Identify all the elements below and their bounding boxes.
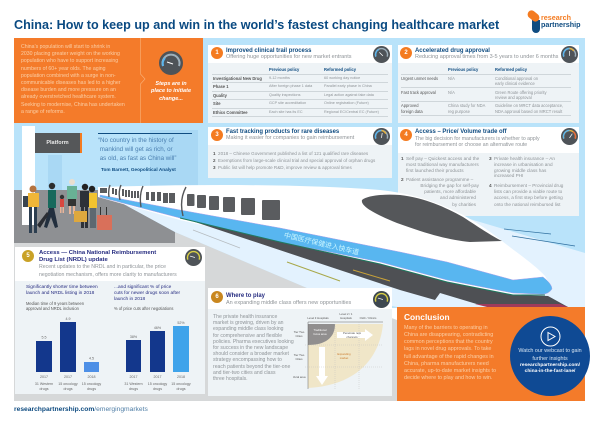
table 2: China study for NDA [448, 103, 485, 108]
table 1: Quality [213, 92, 227, 98]
table 1: After foreign phase 1 data [269, 84, 312, 88]
intro text: a range of reforms. [21, 109, 65, 115]
table 1: Investigational New Drug [213, 76, 262, 80]
bar chart: price cuts: 2017 [130, 375, 138, 379]
table 2: Urgent unmet needs [401, 76, 438, 80]
chart heading right [114, 284, 180, 302]
heading 5: Access — China National Reimbursement [39, 250, 156, 256]
market map: Cities [296, 334, 303, 338]
number 6: 6 [215, 294, 219, 300]
intro text: 2030 placing greater weight on the working [21, 51, 120, 57]
bar chart: time: 15 oncology [82, 382, 101, 386]
subheading 5: Recent updates to the NRDL and in particular, the price [39, 264, 166, 270]
table 1: 60 working day notice [324, 76, 360, 80]
body text 6: should consider a broader market [213, 351, 289, 357]
bar chart: price cuts: 2017 [154, 375, 162, 379]
list 4 left: 2 [401, 177, 404, 182]
icon: gauge [159, 51, 183, 75]
table 2: foreign data [401, 109, 423, 114]
table 2: Approved [401, 103, 419, 108]
callout: steps: change... [159, 96, 183, 102]
heading 6: Where to play [226, 292, 265, 298]
body text 6: for success in the new landscape [213, 345, 288, 351]
list 4 left: and administered [440, 195, 476, 200]
list 4 right: 4 [489, 183, 492, 188]
body text 6: strategy encompassing how to [213, 357, 282, 363]
icon: play [540, 326, 560, 346]
market map: Cities [296, 357, 303, 361]
bar chart: time: 5.5 [42, 336, 46, 340]
bar chart: price cuts: 38% [130, 335, 138, 339]
list 4 right: lists can provide a viable route to [494, 189, 562, 194]
quote: “No country in the history of [98, 137, 174, 144]
body text 6: for comprehensive and flexible [213, 333, 282, 339]
chart heading left [26, 284, 98, 296]
callout: steps: place to initiate [151, 88, 191, 94]
list 3 [213, 150, 376, 170]
heading 1: Improved clinical trail process [226, 48, 311, 54]
quote [98, 133, 192, 174]
bar chart: price cuts: drugs [129, 387, 138, 391]
illustration: passengers [23, 179, 112, 233]
list 4 left: Self pay – Quickest access and the [406, 156, 479, 161]
panel: introduction [14, 38, 203, 123]
conclusion heading: Conclusion [404, 312, 450, 322]
list 4 right: access, a first step before getting [494, 195, 563, 200]
table 1: Phase 1 [213, 84, 228, 89]
panel: conclusion [397, 307, 585, 401]
number 3 [211, 129, 223, 141]
subheading 4 [415, 136, 540, 148]
table 2: Reformed policy [495, 66, 527, 72]
intro text: China’s population will start to shrink in [21, 44, 110, 50]
subheading 5 [39, 264, 177, 278]
body text 6: The private health insurance [213, 314, 277, 320]
bar chart: time: drugs [87, 387, 96, 391]
logo: research partnership: partnership [541, 20, 581, 28]
number 2: 2 [404, 50, 408, 56]
conclusion text: accurate, up-to-date market insights to [404, 368, 496, 374]
body text 6: policies. Pharma executives looking [213, 339, 294, 345]
list 4 right: growing middle class has [494, 168, 546, 173]
table 1: Ethics Committee [213, 110, 248, 114]
logo: research partnership [528, 10, 581, 33]
intro text: Seeking to modernise, China has undertaken [21, 102, 125, 108]
body text 6: reach patients beyond the tier-one [213, 364, 290, 370]
chart note right: % of price cuts after negotiations [114, 306, 173, 310]
body text 6: market is growing, driven by an [213, 320, 284, 326]
market map [293, 312, 383, 389]
table 2: Previous policy [448, 66, 478, 72]
bar chart: price cuts: 15 oncology [148, 382, 167, 386]
list 4 right: increase in urbanisation and [494, 162, 553, 167]
sign: Platform: Platform [46, 140, 69, 146]
conclusion text: common perceptions that the country [404, 339, 493, 345]
conclusion text: decide where to play and how to win. [404, 375, 492, 381]
bar chart: price cuts: drugs [176, 387, 186, 391]
bar chart: price cuts: 46% [154, 326, 162, 330]
number 4: 4 [404, 132, 408, 138]
bar chart: time: drugs [40, 387, 49, 391]
number 2 [400, 47, 412, 59]
table 2: Guideline on MRCT data acceptance, [495, 103, 563, 108]
body text 6: expanding middle class looking [213, 326, 284, 332]
market map: Expanding [337, 352, 351, 356]
bar chart: time: 15 oncology [58, 382, 78, 386]
body text 6: and tier-two cities and class [213, 370, 276, 376]
bar chart: price cuts: 15 oncology [171, 382, 191, 386]
quote attribution: Tom Barnett, Geopolitical Analyst [101, 166, 176, 172]
list 3: 2 Exemptions from large-scale clinical trial and special approval of orphan drugs [213, 158, 375, 163]
table 1: Site [213, 101, 221, 106]
bar chart: price cuts: 31 Western [124, 382, 143, 386]
bar chart: time: 2017 [64, 375, 72, 379]
list 4 right: onto the national reimbursed list [494, 202, 560, 207]
table 1: Reformed policy [324, 66, 356, 72]
subheading 3: Making it easier for companies to gain reimbursement [226, 135, 354, 141]
table 2: Green Route offering priority [495, 90, 547, 94]
table 2: N/A [448, 90, 455, 94]
table 1: GCP site accreditation [269, 101, 306, 105]
intro text: already overstretched healthcare system. [21, 94, 116, 100]
bar chart: time: drugs [64, 387, 73, 391]
market map: channels [346, 335, 358, 339]
market map: Level 3 Hospitals [307, 316, 329, 320]
market map: Tier Two [294, 353, 305, 357]
bar chart: time [35, 317, 102, 391]
chart note left: Median time of 9 years between [26, 300, 84, 306]
table 1: 9-12 months [269, 76, 290, 80]
intro text [21, 44, 125, 115]
market map: OHC / Clinics [360, 316, 377, 320]
table 2: reg purpose [448, 109, 470, 114]
icon: gauge 1 [373, 46, 390, 63]
table 1: Regional EC/Central EC (Future) [324, 110, 379, 114]
number 4 [400, 129, 412, 141]
list 3: 3 Public list will help promote R&D, improve review & approval times [213, 165, 352, 170]
footer link: researchpartnership.com/emergingmarkets [14, 406, 148, 413]
subheading 2: Reducing approval times from 3-5 years to under 6 months [415, 54, 558, 60]
market map: Level 2 / 1 [340, 312, 353, 316]
sign: Platform [35, 133, 82, 153]
chart heading right: cuts for newer drugs soon after [114, 291, 180, 296]
bar chart: time: 4.5 [89, 356, 94, 360]
chart heading left: Significantly shorter time between [26, 285, 98, 290]
subheading 4: The big decision for manufacturers is whether to apply [415, 136, 540, 142]
icon: gauge 3 [373, 128, 390, 145]
market map: market [340, 356, 348, 360]
table 1: Legal action against fake data [324, 92, 374, 96]
table 2: review and approval [495, 95, 532, 100]
conclusion text [404, 325, 496, 381]
webcast text: Watch our webcast to gain [518, 348, 582, 354]
number 5 [22, 250, 34, 262]
table 2: Conditional approval on [495, 76, 538, 80]
webcast text: researchpartnership.com/ [520, 363, 580, 368]
market map: Tier Two [294, 330, 305, 334]
body text 6 [213, 314, 294, 382]
conclusion text: China, pharma manufacturers need [404, 361, 489, 367]
table 1: Parallel early phase in China [324, 84, 372, 88]
bar chart: time: 4.9 [66, 317, 70, 321]
intro text: disease burden and more pressure on an [21, 87, 116, 93]
intro text: population combined with a surge in non- [21, 73, 116, 79]
list 4 left [401, 156, 479, 207]
quote: mankind will get as rich, or [100, 146, 173, 153]
heading 3: Fast tracking products for rare diseases [226, 128, 339, 134]
panel 4: access price volume [398, 127, 579, 216]
list 4 left: Bridging the gap for self-pay [420, 183, 479, 188]
bar chart: time: 2018 [88, 375, 96, 379]
quote: as old, as fast as China will” [100, 155, 176, 162]
heading 4: Access – Price/ Volume trade off [415, 128, 507, 134]
market map: Penetrate new [343, 331, 362, 335]
subheading 6: An expanding middle class offers new opportunities [226, 300, 351, 306]
list 3: 1 2018 – Chinese Government published a list of 121 qualified rare diseases [213, 150, 368, 156]
number 1 [211, 47, 223, 59]
chart heading left: launch and NRDL listing in 2018 [26, 291, 94, 296]
heading 5 [39, 250, 156, 263]
heading 2: Accelerated drug approval [415, 48, 490, 54]
market map: focus area [313, 332, 327, 336]
table 1: Online registration (Future) [324, 101, 369, 105]
chart heading right: ...and significant % of price [114, 285, 171, 290]
conclusion text: lags in novel drug approvals. To take [404, 346, 491, 352]
webcast text [518, 348, 582, 374]
list 4 right: Private health insurance – An [494, 156, 555, 161]
number 5: 5 [26, 253, 30, 259]
market map: Traditional [314, 328, 327, 332]
list 4 right: increased PHI [494, 173, 523, 178]
number 1: 1 [215, 50, 219, 56]
bar chart: time: 2017 [40, 375, 48, 379]
table 2: NDA approval based on MRCT result [495, 109, 562, 114]
conclusion text: full advantage of the rapid changes in [404, 354, 494, 360]
panel 3: rare diseases [208, 127, 392, 178]
body text 6: three hospitals. [213, 376, 248, 382]
list 4 left: patients, more affordable [424, 189, 476, 194]
bar chart: price cuts: drugs [153, 387, 162, 391]
divider chevron [140, 38, 146, 123]
list 4 right: 3 [489, 156, 492, 161]
list 4 left: by charities [452, 202, 476, 207]
list 4 left: most traditional way manufacturers [406, 162, 479, 167]
table 1: Each site has its EC [269, 110, 303, 114]
bar chart: price cuts [124, 321, 191, 391]
chart note left: approval and NRDL inclusion [26, 306, 79, 311]
number 3: 3 [215, 132, 219, 138]
panel 2: drug approval [398, 45, 579, 123]
conclusion text: China are disappearing, contradicting [404, 332, 493, 338]
icon: gauge 6 [373, 291, 390, 308]
subheading 1: Offering huge opportunities for new market entrants [226, 54, 352, 60]
icon: gauge 2 [561, 46, 578, 63]
table 1: Previous policy [269, 66, 299, 72]
callout: steps [150, 81, 191, 102]
list 4 right: Reimbursement – Provincial drug [494, 183, 563, 188]
webcast text: china-in-the-fast-lane/ [525, 369, 575, 374]
bar chart: price cuts: 52% [177, 321, 185, 325]
table 2: Fast track approval [401, 90, 436, 94]
title: China: How to keep up and win in the world’s fastest changing healthcare market [14, 18, 499, 32]
webcast text: further insights [532, 356, 568, 362]
panel 1: clinical trial [208, 45, 392, 123]
panel 6: where to play [208, 288, 392, 396]
table 2: early clinical evidence [495, 81, 535, 86]
number 6 [211, 291, 223, 303]
chart note left [26, 300, 84, 311]
list 4 right [489, 156, 564, 207]
bar chart: price cuts: 2018 [177, 375, 185, 379]
panel 5: NRDL [15, 247, 205, 394]
table 1 [212, 66, 388, 117]
subheading 5: negotiation mechanism, offers more clarity to manufacturers [39, 272, 177, 278]
subheading 4: for reimbursement or choose an alternative route [415, 142, 527, 148]
callout: steps: Steps are in [155, 81, 187, 87]
table 1: Quality inspections [269, 92, 300, 96]
conclusion text: Many of the barriers to operating in [404, 325, 488, 331]
icon: gauge 5 [185, 249, 202, 266]
table 2: N/A [448, 76, 455, 80]
heading 5: Drug List (NRDL) update [39, 257, 108, 263]
chart heading right: launch in 2018 [114, 297, 145, 302]
intro text: population who have to support increasing [21, 58, 118, 64]
illustration: high-speed train: 中国医疗保健进入快车道 [283, 230, 360, 257]
intro text: communicable diseases has led to a higher [21, 80, 120, 86]
market map: Hospitals [340, 316, 352, 320]
webcast circle [510, 316, 590, 396]
table 2 [401, 66, 571, 116]
list 4 left: Patient assistance programme – [406, 177, 473, 182]
list 4 left: 1 [401, 156, 404, 161]
logo: research partnership: research [541, 12, 571, 22]
list 4 left: first launched their products [406, 168, 464, 173]
bar chart: time: 31 Western [35, 382, 53, 386]
intro text: numbers of 60+ year olds. The aging [21, 66, 106, 72]
icon: gauge 4 [561, 128, 578, 145]
